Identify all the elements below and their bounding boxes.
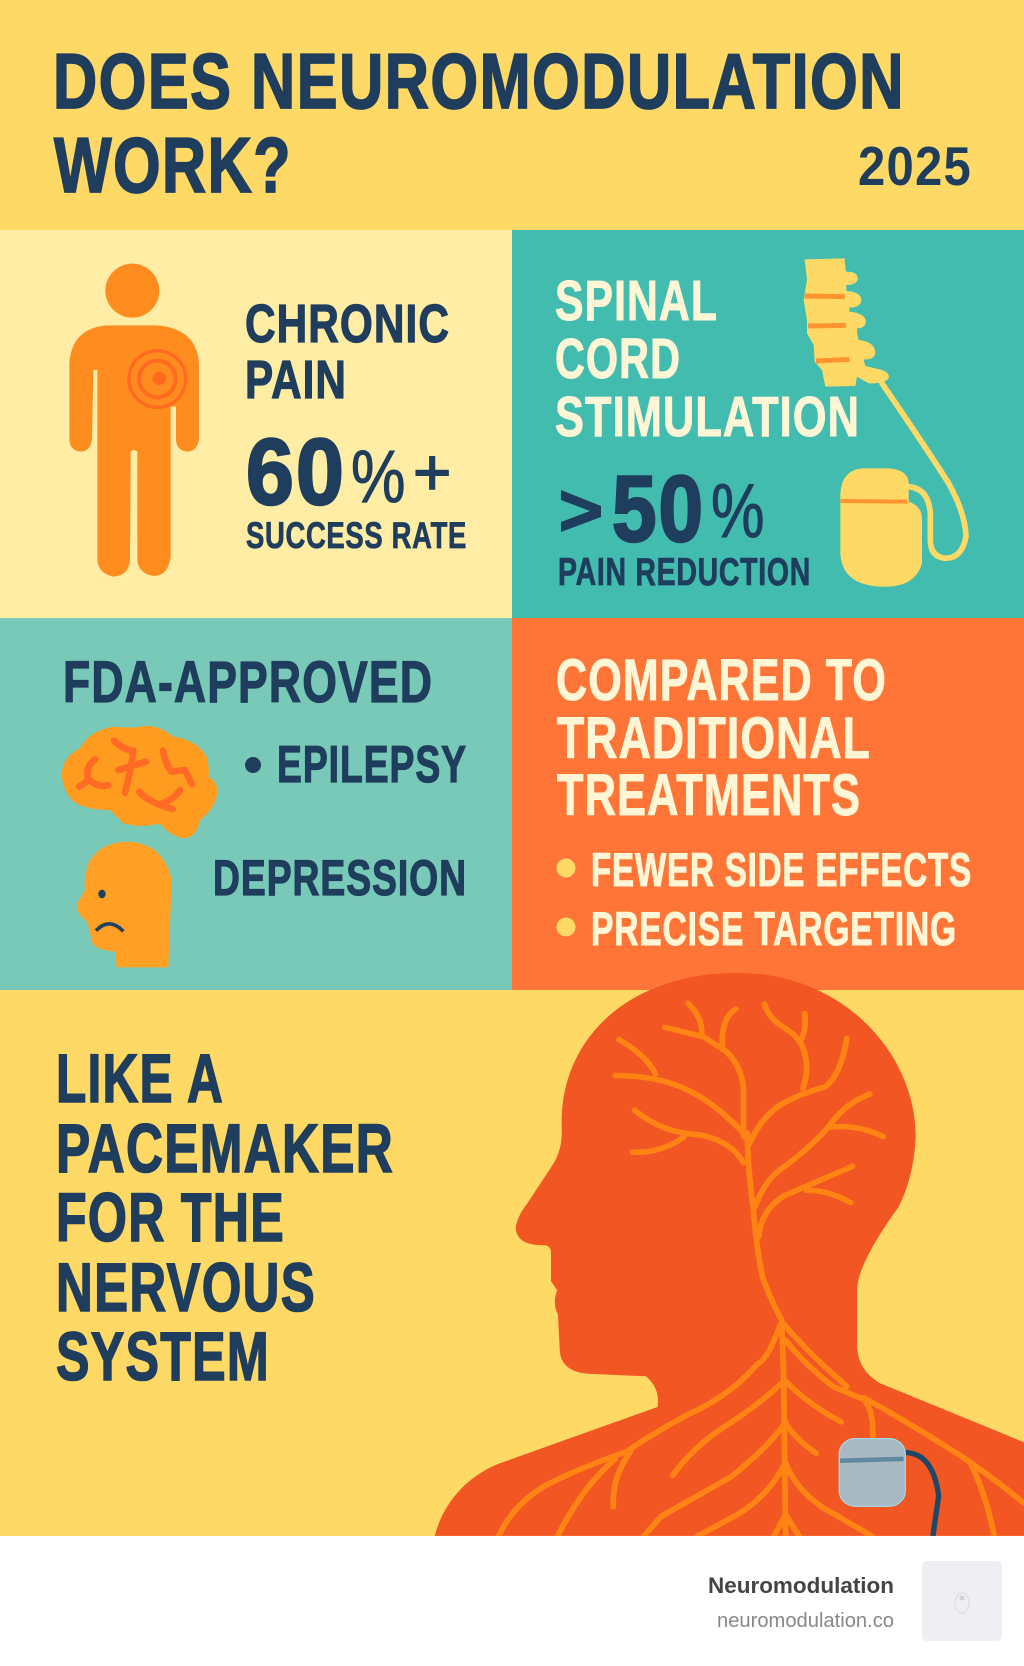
brand name: Neuromodulation — [708, 1573, 894, 1598]
implant device — [839, 1439, 905, 1506]
heading: like a pacemaker for the nervous system: PACEMAKER — [56, 1110, 394, 1187]
icon: sad head — [77, 842, 172, 967]
brand url: neuromodulation.co — [717, 1610, 894, 1632]
heading: like a pacemaker for the nervous system — [56, 1040, 394, 1395]
silhouette — [435, 973, 1024, 1536]
icon: spine with lead and stimulator — [804, 258, 966, 587]
heading: compared to traditional treatments: TREATMENTS — [557, 763, 861, 828]
title: WORK? — [54, 121, 292, 209]
heading: spinal cord stimulation — [555, 269, 860, 449]
heading: chronic pain — [245, 294, 450, 410]
heading: like a pacemaker for the nervous system: FOR THE — [56, 1179, 285, 1256]
icon: human figure with pain target — [69, 264, 199, 577]
heading: compared to traditional treatments: TRADITIONAL — [557, 706, 871, 771]
illustration: head and nervous system with implant — [435, 973, 1024, 1536]
implant cable — [903, 1453, 939, 1536]
stat: greater than 50%: % — [711, 469, 766, 554]
panel: compared to traditional treatments — [512, 618, 1024, 990]
heading: fda-approved: FDA-APPROVED — [63, 650, 433, 715]
year: 2025 — [858, 135, 972, 197]
heading: compared to traditional treatments: COMPARED TO — [556, 648, 887, 713]
heading: spinal cord stimulation: STIMULATION — [555, 385, 860, 449]
heading: compared to traditional treatments — [556, 648, 887, 828]
footer — [0, 1536, 1024, 1666]
list item: depression: DEPRESSION — [213, 850, 467, 906]
stat: greater than 50%: 50 — [612, 456, 705, 561]
heading: like a pacemaker for the nervous system: NERVOUS — [56, 1249, 316, 1326]
list item: epilepsy — [245, 736, 467, 794]
stat: 60%+ — [246, 419, 453, 524]
panel: pacemaker analogy — [0, 973, 1024, 1536]
label: pain reduction: PAIN REDUCTION — [558, 551, 811, 594]
panel: header — [0, 0, 1024, 230]
stat: greater than 50% — [561, 456, 766, 561]
panel: chronic pain — [0, 230, 512, 618]
stat: 60%+: 60 — [246, 419, 346, 524]
heading: like a pacemaker for the nervous system: SYSTEM — [56, 1318, 270, 1395]
heading: chronic pain: CHRONIC — [245, 294, 450, 354]
logo placeholder — [922, 1561, 1002, 1641]
heading: like a pacemaker for the nervous system: LIKE A — [56, 1040, 224, 1117]
heading: spinal cord stimulation: SPINAL — [555, 269, 718, 333]
panel: spinal cord stimulation — [512, 230, 1024, 618]
label: success rate: SUCCESS RATE — [246, 515, 467, 556]
icon: brain — [62, 726, 217, 838]
panel: fda-approved — [0, 618, 512, 990]
list item: epilepsy: EPILEPSY — [277, 736, 467, 794]
nerve network — [499, 1003, 1024, 1536]
heading: spinal cord stimulation: CORD — [555, 327, 681, 391]
stat: 60%+: % — [351, 435, 407, 518]
stat: 60%+: + — [413, 435, 453, 509]
heading: chronic pain: PAIN — [245, 350, 347, 410]
title — [53, 37, 905, 209]
